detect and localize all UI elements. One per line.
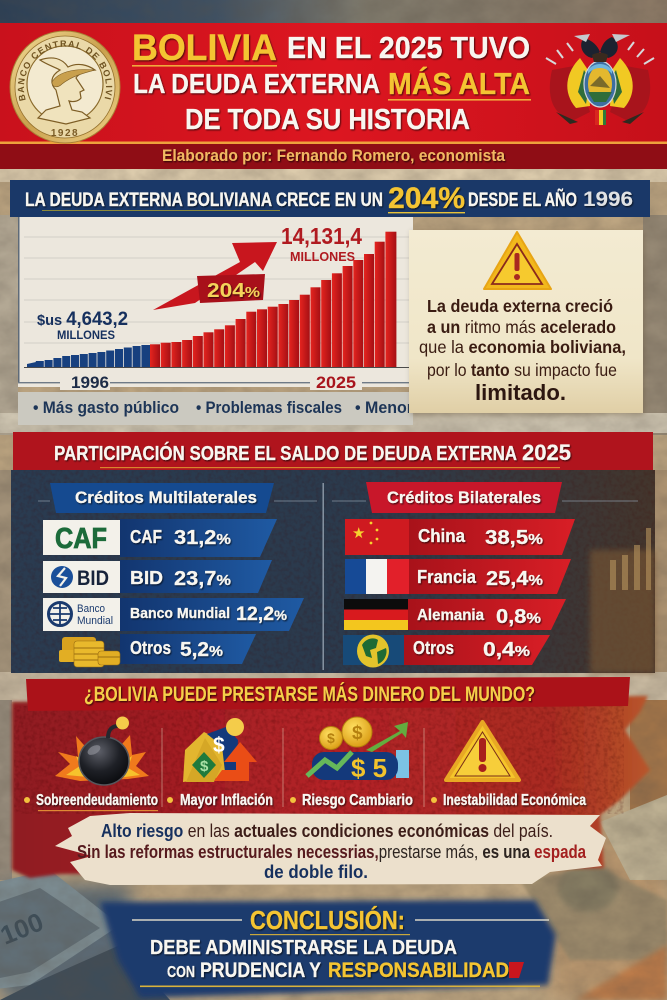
end value label (281, 223, 362, 264)
causes list: • Menor (355, 398, 413, 417)
heading: blue banner: 1996 (583, 188, 633, 211)
callout: risk statement: Sin las reformas estructurales necessrias,prestarse más, es una espada (77, 842, 587, 862)
axis label 2025: 2025 (316, 373, 356, 392)
bilateral column (343, 482, 575, 668)
row: China (345, 519, 575, 555)
author credit: Elaborado por: Fernando Romero, economista (162, 146, 505, 165)
title: BOLIVIA (132, 27, 277, 68)
row: Francia: 25,4% (486, 568, 543, 590)
row: BID: BID (130, 568, 163, 588)
conclusion text: DEBE ADMINISTRARSE LA DEUDA (150, 937, 457, 959)
callout: warning note: La deuda externa creció (427, 296, 613, 316)
label: mayor inflacion: Mayor Inflación (180, 792, 273, 809)
row: Banco Mundial (43, 598, 304, 631)
panel: risks (12, 677, 650, 885)
heading: multilateral credits: Créditos Multilaterales (75, 488, 257, 507)
conclusion text: CON (167, 964, 195, 981)
row: BID: 23,7% (174, 568, 231, 590)
heading: debt share: 2025 (522, 440, 571, 465)
row: otros bilaterales (343, 634, 550, 668)
start value label: $us 4,643,2 (37, 309, 128, 330)
callout: warning note: por lo tanto su impacto fue (427, 360, 617, 380)
row: China: ★ (352, 524, 365, 542)
label: sobreendeudamiento (24, 792, 158, 811)
end value label: MILLONES (290, 249, 355, 264)
title: EN EL 2025 TUVO (287, 30, 530, 65)
icon: warning triangle (484, 232, 551, 289)
row: BID: BID (77, 567, 109, 590)
start value label: MILLONES (57, 328, 115, 342)
causes list (18, 392, 413, 425)
row: otros multilaterales: Otros (130, 638, 171, 658)
callout: risk statement (55, 813, 606, 885)
row: Francia: Francia (417, 567, 477, 587)
callout: warning note: a un ritmo más acelerado (427, 317, 616, 337)
row: Alemania: 0,8% (496, 606, 541, 628)
row: CAF: CAF (130, 527, 162, 547)
callout: warning note: que la economia boliviana, (419, 337, 626, 357)
row: Alemania (344, 599, 566, 630)
panel: header (0, 23, 667, 169)
heading: blue banner (10, 180, 650, 217)
label: sobreendeudamiento: Sobreendeudamiento (36, 792, 158, 809)
arrow: growth (153, 242, 277, 310)
title: DE TODA SU HISTORIA (185, 104, 470, 136)
row: CAF: CAF (55, 523, 107, 555)
heading: debt share (13, 432, 653, 470)
heading: debt share: PARTICIPACIÓN SOBRE EL SALDO DE DEUDA EXTERNA (54, 441, 517, 465)
icon: exchange rate (307, 717, 409, 783)
conclusion text: PRUDENCIA Y (200, 959, 321, 982)
icon: globe (357, 634, 389, 668)
row: otros bilaterales: 0,4 % (483, 639, 530, 661)
arrow: growth: 204 % (207, 280, 260, 302)
multilateral column (43, 483, 304, 667)
icon: exchange rate: $ (352, 723, 363, 744)
conclusion text (150, 937, 524, 982)
heading: blue banner: DESDE EL AÑO (468, 189, 577, 211)
callout: risk statement: Alto riesgo en las actuales condiciones económicas del país. (101, 821, 553, 841)
heading: blue banner: 204% (388, 182, 465, 215)
icon: instability warning (446, 722, 519, 780)
icon: inflation house: $ (200, 758, 209, 775)
title (132, 27, 531, 136)
row: China: China (418, 526, 466, 546)
icon: inflation house: $ (213, 734, 225, 757)
bar chart (24, 232, 410, 368)
icon: exchange rate: $ 5 (351, 753, 387, 783)
row: Alemania: Alemania (417, 607, 484, 624)
row: otros bilaterales: Otros (413, 638, 454, 658)
icon: inflation house (183, 718, 257, 782)
heading: risks question: ¿BOLIVIA PUEDE PRESTARSE MÁS DINERO DEL MUNDO? (84, 683, 535, 706)
end value label: 14,131,4 (281, 223, 362, 249)
heading: multilateral credits (50, 483, 274, 513)
icon: exchange rate: $ (327, 730, 335, 746)
heading: bilateral credits (366, 482, 562, 513)
title: MÁS ALTA (388, 66, 530, 101)
axis label 2025 (310, 372, 362, 392)
row: Banco Mundial: 12,2% (236, 604, 288, 625)
row: CAF (43, 519, 277, 557)
row: Banco Mundial: Banco Mundial (130, 605, 230, 622)
label: inestabilidad economica: Inestabilidad Económica (443, 792, 586, 809)
conclusion text: RESPONSABILIDAD (328, 959, 509, 982)
axis label 1996: 1996 (71, 373, 109, 392)
causes list: • Más gasto público (33, 398, 179, 417)
icon: Bolivia coat of arms (546, 34, 654, 125)
panel: conclusion (100, 900, 556, 998)
row: Banco Mundial: Mundial (77, 615, 113, 627)
icon: central bank medal (10, 30, 120, 144)
row: CAF: 31,2% (174, 527, 231, 549)
label: riesgo cambiario: Riesgo Cambiario (302, 792, 413, 809)
panel: credit breakdown (11, 470, 655, 673)
causes list: • Problemas fiscales (196, 398, 342, 417)
icon: central bank medal: 1928 (51, 128, 79, 139)
title: LA DEUDA EXTERNA (133, 68, 380, 99)
row: BID (43, 560, 272, 593)
heading: bilateral credits: Créditos Bilaterales (387, 488, 541, 507)
icon: gold coins (59, 637, 120, 667)
row: otros multilaterales: 5,2% (180, 639, 223, 661)
callout: warning note: limitado. (475, 380, 566, 405)
heading: blue banner: LA DEUDA EXTERNA BOLIVIANA CRECE EN UN (25, 190, 383, 211)
row: otros multilaterales (59, 634, 256, 667)
heading: conclusion: CONCLUSIÓN: (250, 905, 405, 935)
heading: risks question (26, 677, 630, 711)
row: China: 38,5 % (485, 527, 543, 549)
row: Banco Mundial: Banco (77, 603, 105, 615)
callout: warning note (409, 230, 644, 415)
callout: risk statement: de doble filo. (264, 862, 368, 882)
start value label (37, 309, 128, 342)
panel: growth chart (18, 217, 413, 425)
row: Francia (345, 559, 571, 594)
icon: bomb (55, 716, 149, 785)
